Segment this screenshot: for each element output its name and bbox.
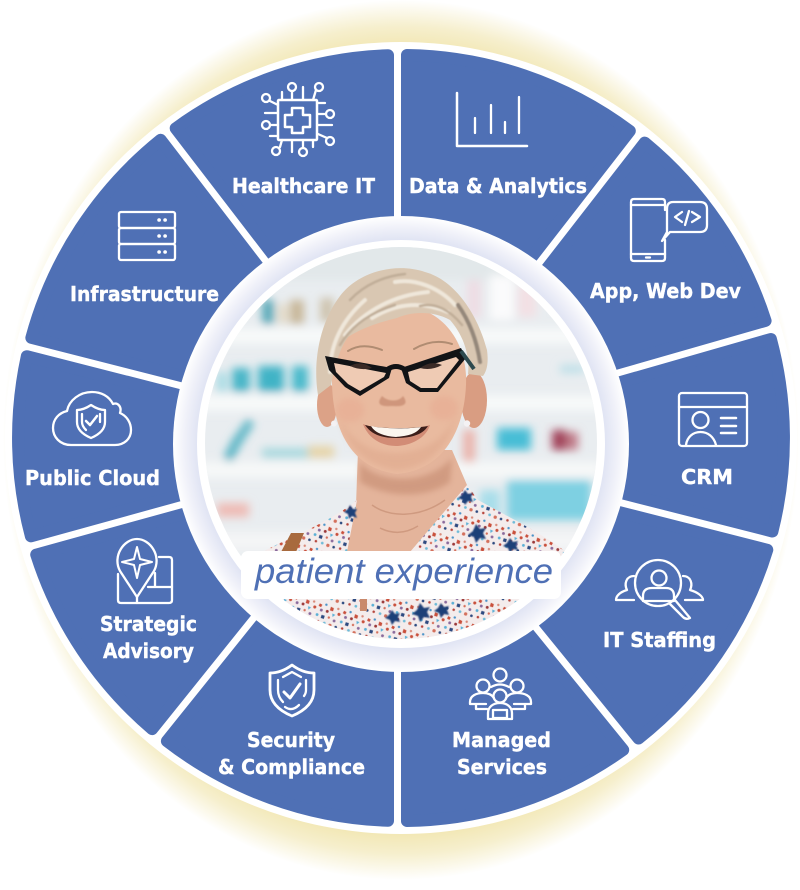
label: Public Cloud: Public Cloud	[25, 466, 160, 490]
icon: bar chart	[457, 93, 527, 146]
glasses	[325, 348, 474, 396]
label: Security & Compliance: Security	[247, 728, 335, 752]
icon: shield with check	[270, 665, 314, 716]
label: Data & Analytics: Data & Analytics	[409, 174, 587, 198]
inner white ring	[197, 240, 605, 648]
face	[332, 313, 466, 456]
bag strap	[281, 533, 304, 552]
label: Managed Services: Managed	[452, 728, 551, 752]
ears and earrings	[317, 372, 487, 428]
label: CRM: CRM	[681, 465, 733, 489]
floral details	[344, 490, 518, 625]
label: Managed Services: Services	[457, 755, 547, 779]
icon: medical chip	[262, 83, 334, 156]
label: Security & Compliance: & Compliance	[218, 755, 365, 779]
label: Strategic Advisory	[100, 612, 197, 663]
panel: Security & Compliance	[167, 614, 388, 821]
icon: magnifier with people	[616, 560, 703, 619]
nose	[379, 396, 406, 406]
panel: Infrastructure	[31, 140, 267, 380]
hair	[316, 268, 488, 395]
icon: phone with code bubble	[631, 199, 707, 261]
label: IT Staffing: IT Staffing	[603, 628, 716, 652]
icon: server stack	[119, 212, 175, 260]
label: Security & Compliance	[218, 728, 365, 779]
icon: cloud with shield	[53, 392, 131, 445]
shirt placket	[360, 599, 367, 611]
panel: Public Cloud	[18, 356, 194, 536]
panel: Managed Services	[407, 624, 623, 821]
panel: Data & Analytics	[407, 55, 630, 268]
icon: map pin with star	[117, 539, 172, 603]
centre ring	[173, 216, 629, 672]
panel: Healthcare IT	[176, 55, 388, 266]
icon: contact card	[679, 393, 747, 446]
shirt	[270, 485, 564, 639]
label: App, Web Dev: App, Web Dev	[590, 279, 741, 303]
caption: patient experience: patient experience	[254, 552, 553, 591]
panel: IT Staffing	[536, 508, 767, 738]
panel: Strategic Advisory	[36, 510, 254, 729]
label: Infrastructure: Infrastructure	[70, 282, 219, 306]
label: Managed Services	[452, 728, 551, 779]
label: Strategic Advisory: Strategic	[100, 612, 197, 636]
label: Healthcare IT: Healthcare IT	[232, 174, 375, 198]
panel: App, Web Dev	[538, 143, 766, 368]
icon: team with laptops	[470, 668, 531, 719]
eyebrows	[348, 342, 452, 351]
label: Strategic Advisory: Advisory	[103, 639, 194, 663]
neck shadows and creases	[360, 458, 452, 532]
panel: CRM	[606, 339, 784, 532]
smile	[363, 424, 430, 446]
photo: smiling woman in pharmacy	[200, 240, 602, 650]
neck	[346, 450, 470, 555]
